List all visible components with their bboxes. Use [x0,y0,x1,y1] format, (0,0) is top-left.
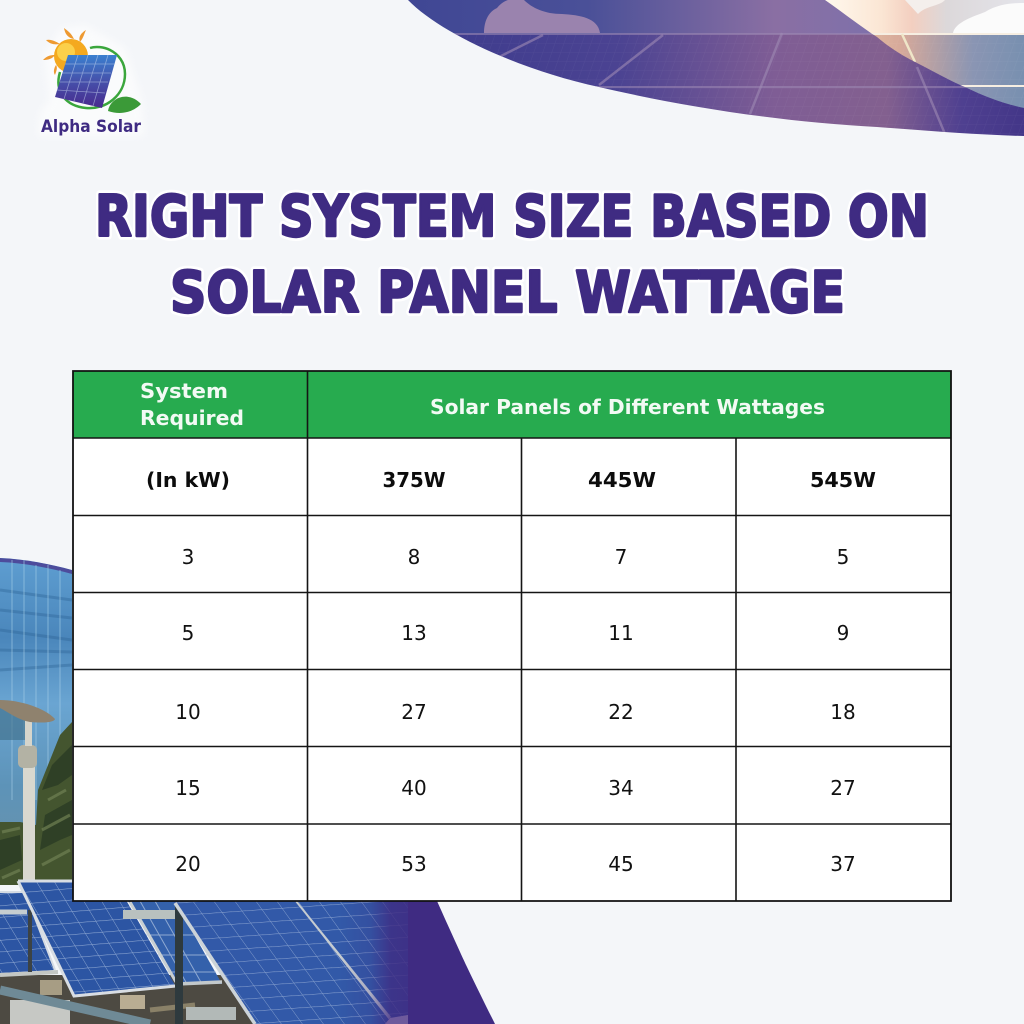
subheader row: (In kW) [146,468,230,492]
solar panel: right large [173,901,392,1024]
top right solar panel photo [400,0,1024,136]
table body [73,371,951,901]
purple corner shape [408,901,495,1024]
ground and frames under solar panels [0,975,260,1024]
row: 5 kW: 9 [837,621,849,645]
row: 15 kW: 34 [608,776,634,800]
row: 5 kW: 11 [608,621,634,645]
row: 10 kW [175,700,856,724]
logo halo [38,25,144,136]
row: 3 kW: 3 [182,545,194,569]
row: 5 kW: 5 [182,621,194,645]
table header band [73,371,951,438]
header: system required [140,379,244,430]
row: 15 kW: 27 [830,776,856,800]
subheader row: 375W [382,468,446,492]
row: 5 kW: 13 [401,621,427,645]
icon: solar panel [55,55,117,108]
title: SOLAR PANEL WATTAGE [170,260,845,326]
icon: leaf [108,97,141,113]
header: system required: Required [140,406,244,430]
row: 15 kW [175,776,856,800]
building photo [0,555,72,885]
subheader row [146,468,876,492]
header: system required: System [140,379,228,403]
row: 15 kW: 15 [175,776,201,800]
row: 10 kW: 22 [608,700,634,724]
title [95,184,929,326]
icon: green ring [58,47,125,108]
row: 3 kW: 5 [837,545,849,569]
row: 20 kW: 20 [175,852,201,876]
row: 20 kW [175,852,856,876]
row: 3 kW: 7 [615,545,627,569]
header: solar panels of different wattages: Solar Panels of Different Wattages [430,395,825,419]
top right sunlit corner [820,0,1024,114]
row: 15 kW: 40 [401,776,427,800]
row: 5 kW [182,621,849,645]
logo [38,25,144,137]
trees [0,722,72,885]
cloud in top photo [484,0,600,33]
solar panel: fading into purple [297,901,408,1024]
solar panel: middle rear [128,901,222,984]
row: 20 kW: 45 [608,852,634,876]
row: 3 kW [182,545,849,569]
title: SOLAR PANEL WATTAGE [170,260,845,326]
solar panel: left large [18,881,176,996]
row: 10 kW: 10 [175,700,201,724]
table [73,371,951,901]
logo wordmark: Alpha Solar [41,117,142,137]
subheader row: 445W [588,468,656,492]
row: 20 kW: 37 [830,852,856,876]
row: 3 kW: 8 [408,545,420,569]
row: 20 kW: 53 [401,852,427,876]
mounting rail and post [0,905,236,1024]
icon: sun [43,28,88,75]
row: 10 kW: 18 [830,700,856,724]
solar panel: far left [0,892,58,975]
subheader row: 545W [810,468,876,492]
row: 10 kW: 27 [401,700,427,724]
lamp post [0,700,55,880]
